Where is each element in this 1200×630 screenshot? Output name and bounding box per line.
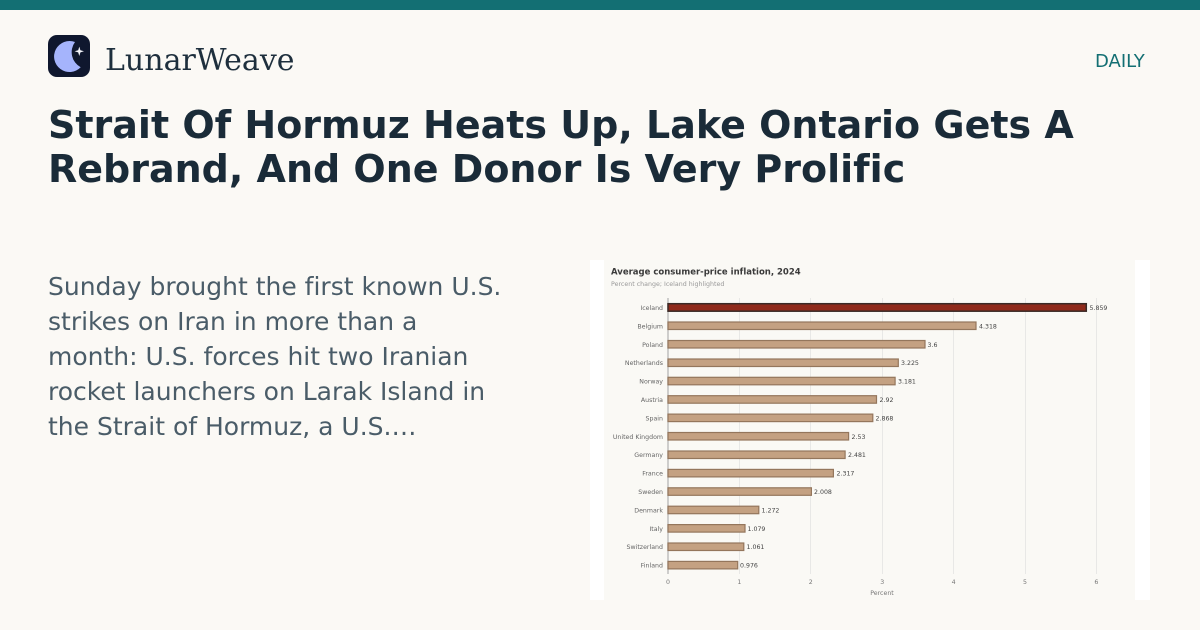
value labels: 2.008 [814, 489, 832, 496]
value labels: 3.6 [928, 342, 937, 349]
country labels: Spain [646, 415, 663, 422]
x axis ticks: 5 [1023, 579, 1027, 586]
summary text: rocket launchers on Larak Island in [48, 377, 485, 406]
title: Strait Of Hormuz Heats Up, Lake Ontario Gets A [48, 103, 1074, 147]
title [48, 103, 1074, 191]
bar chart: inflation [590, 260, 1150, 600]
country labels: Poland [642, 342, 663, 349]
value labels [740, 305, 1107, 570]
country labels: Denmark [634, 507, 663, 514]
value labels: 2.317 [836, 471, 854, 478]
country labels: France [642, 471, 663, 478]
summary text [48, 272, 501, 441]
x axis ticks: 4 [952, 579, 956, 586]
summary text: strikes on Iran in more than a [48, 307, 417, 336]
country labels: Iceland [640, 305, 663, 312]
value labels: 5.859 [1090, 305, 1107, 312]
value labels: 1.079 [748, 526, 765, 533]
country labels: Belgium [637, 323, 663, 330]
highlighted bar: Iceland [668, 304, 1086, 311]
x axis ticks: 0 [666, 579, 670, 586]
chart title: Average consumer-price inflation, 2024 [611, 268, 801, 278]
value labels: 1.272 [762, 507, 779, 514]
country labels: Italy [649, 526, 663, 533]
country labels: Sweden [638, 489, 663, 496]
country labels: Switzerland [627, 544, 663, 551]
title: Rebrand, And One Donor Is Very Prolific [48, 147, 905, 191]
value labels: 2.481 [848, 452, 866, 459]
value labels: 4.318 [979, 323, 997, 330]
country labels: Norway [639, 379, 663, 386]
x axis ticks: 3 [880, 579, 884, 586]
section tag: DAILY [1095, 51, 1145, 72]
summary text: month: U.S. forces hit two Iranian [48, 342, 468, 371]
value labels: 3.181 [898, 379, 916, 386]
bars [668, 322, 976, 569]
summary text: Sunday brought the first known U.S. [48, 272, 501, 301]
country labels [613, 305, 663, 570]
summary text: the Strait of Hormuz, a U.S.… [48, 412, 416, 441]
country labels: Netherlands [625, 360, 663, 367]
value labels: 2.868 [876, 415, 893, 422]
value labels: 0.976 [740, 563, 758, 570]
country labels: United Kingdom [613, 434, 663, 441]
icon: moon logo [48, 35, 90, 77]
x axis ticks [666, 579, 1098, 586]
axis line [667, 298, 669, 574]
value labels: 2.92 [880, 397, 893, 404]
x axis ticks: 2 [809, 579, 813, 586]
country labels: Germany [634, 452, 663, 459]
top accent bar [0, 0, 1200, 10]
country labels: Finland [641, 563, 663, 570]
country labels: Austria [641, 397, 663, 404]
x axis ticks: 6 [1094, 579, 1098, 586]
chart subtitle: Percent change; Iceland highlighted [611, 281, 724, 288]
x axis ticks: 1 [737, 579, 741, 586]
x axis label: Percent [870, 590, 894, 597]
value labels: 3.225 [901, 360, 919, 367]
brand name: LunarWeave [105, 43, 295, 78]
value labels: 2.53 [852, 434, 865, 441]
value labels: 1.061 [746, 544, 764, 551]
